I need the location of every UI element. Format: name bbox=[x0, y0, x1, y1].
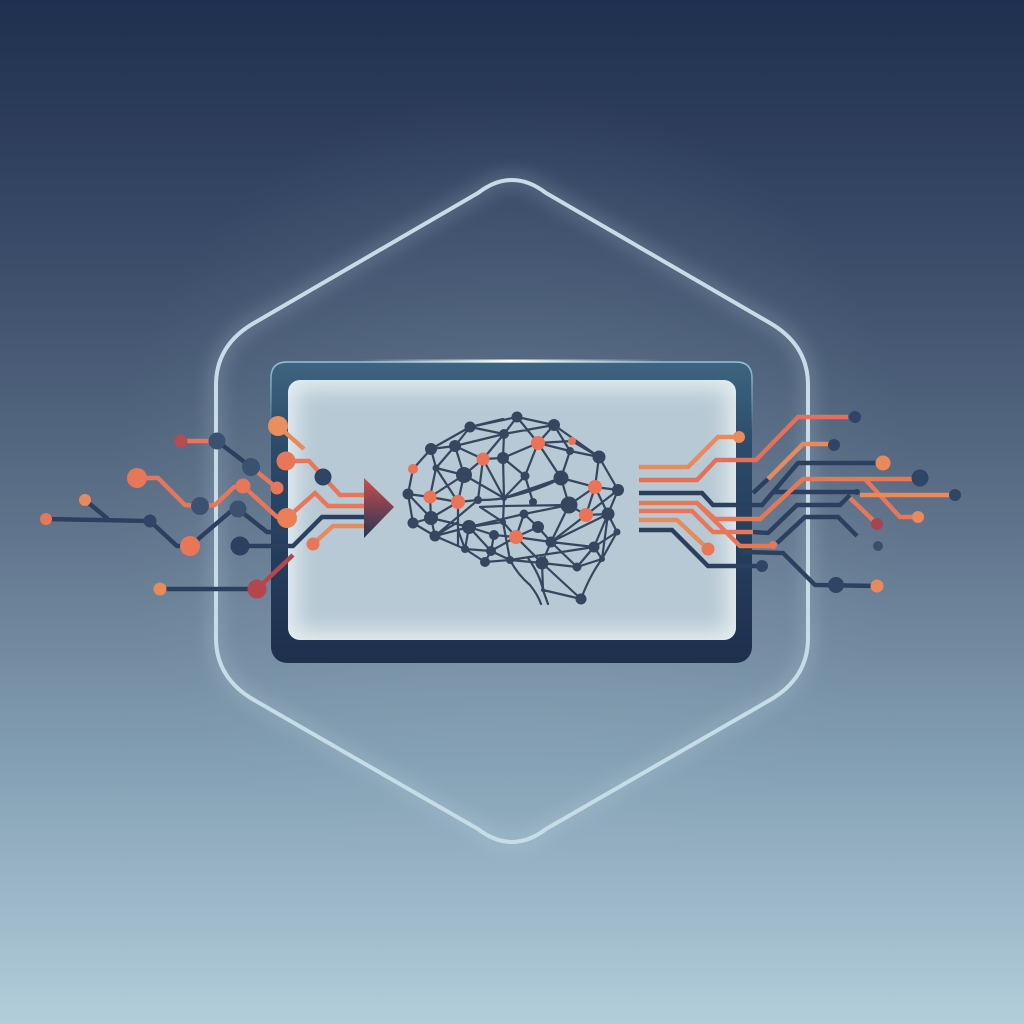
right output circuit lines bbox=[639, 417, 955, 586]
brain edges bbox=[408, 417, 618, 604]
left navy traces bbox=[46, 441, 365, 589]
brain network bbox=[402, 412, 624, 604]
right navy traces bbox=[639, 463, 877, 586]
frame edge light bbox=[271, 362, 752, 430]
left nodes bbox=[40, 416, 332, 598]
device frame bbox=[271, 362, 752, 663]
right nodes bbox=[702, 411, 961, 593]
screen bbox=[288, 380, 736, 640]
left input circuit lines bbox=[46, 426, 365, 589]
arrow bbox=[364, 478, 394, 538]
top highlight bbox=[360, 360, 664, 362]
hexagon outline with glow bbox=[216, 180, 808, 842]
left red trace bbox=[257, 555, 293, 589]
device panel bbox=[271, 360, 752, 663]
right orange traces bbox=[639, 417, 955, 549]
left orange traces bbox=[137, 426, 365, 544]
brain orange nodes bbox=[408, 436, 602, 544]
brain navy nodes bbox=[402, 412, 624, 604]
